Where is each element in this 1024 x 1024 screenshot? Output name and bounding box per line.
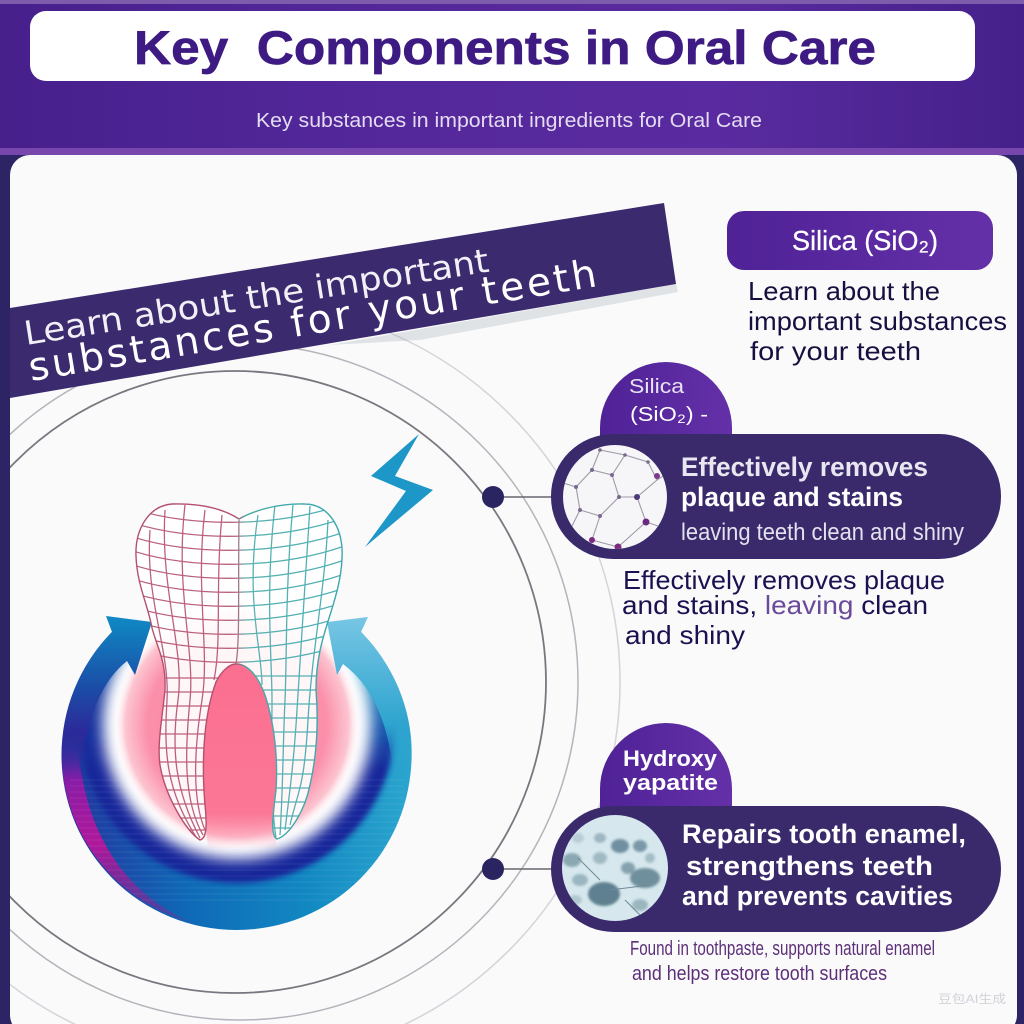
tab: silica: Silica [629, 376, 685, 398]
arrow: right [327, 617, 412, 770]
connector: silica node [482, 486, 554, 508]
watermark: 豆包AI生成 [938, 992, 1006, 1006]
label: silica pill [727, 211, 993, 270]
text: silica description: and shiny [625, 620, 745, 650]
tab: hydroxyapatite [600, 723, 732, 812]
text: hydroxyapatite benefit: and prevents cavities [682, 881, 953, 911]
text: intro paragraph: important substances [748, 306, 1007, 336]
panel: hydroxyapatite benefit [551, 806, 1001, 932]
inner shading [70, 686, 404, 900]
pink glow [113, 601, 361, 849]
text: silica benefit: Effectively removes [681, 452, 928, 482]
text: hydroxyapatite benefit: strengthens teeth [686, 851, 933, 881]
text: silica benefit: plaque and stains [681, 482, 903, 512]
text: silica description: Effectively removes plaque [623, 565, 945, 595]
text: silica benefit [681, 452, 964, 546]
text: hydroxyapatite benefit [682, 819, 966, 911]
text: silica benefit: leaving teeth clean and shiny [681, 519, 964, 546]
icon: tooth in gradient ring [61, 500, 412, 930]
banner: important substances: substances for your teeth [25, 252, 600, 391]
white glow [103, 591, 371, 859]
connector: hydroxyapatite node [482, 858, 554, 880]
concentric rings [0, 302, 620, 1024]
label: silica pill: Silica (SiO₂) [792, 225, 938, 256]
text: intro paragraph: Learn about the [748, 276, 940, 306]
title [30, 11, 975, 81]
banner: important substances: Learn about the important [21, 241, 492, 353]
text: intro paragraph [748, 276, 1007, 366]
text: intro paragraph: for your teeth [750, 336, 921, 366]
text: hydroxyapatite description: and helps restore tooth surfaces [632, 963, 887, 985]
tab: silica: (SiO₂) - [630, 404, 708, 426]
text: hydroxyapatite benefit: Repairs tooth enamel, [682, 819, 966, 849]
panel: silica benefit [551, 434, 1001, 559]
text: hydroxyapatite description [630, 938, 935, 985]
pink arch between roots [204, 664, 277, 848]
arrow: left [62, 616, 152, 770]
icon: lightning bolt [365, 434, 433, 547]
magenta rim [62, 745, 190, 922]
ring band [61, 632, 411, 930]
subtitle: Key substances in important ingredients for Oral Care [256, 110, 762, 132]
tab: hydroxyapatite: Hydroxy [623, 746, 718, 771]
header band [0, 0, 1024, 155]
text: silica description: and stains, leaving clean [622, 590, 928, 620]
tab: silica [600, 362, 732, 440]
title: Key Components in Oral Care [134, 21, 876, 74]
text: silica description [622, 565, 945, 650]
tab: hydroxyapatite: yapatite [623, 770, 718, 795]
tooth outline [136, 504, 342, 840]
banner: important substances [10, 203, 678, 398]
tooth mesh [130, 500, 350, 845]
icon: hydroxyapatite crystals [562, 815, 668, 921]
icon: silica hexagon lattice [560, 445, 672, 550]
text: hydroxyapatite description: Found in toothpaste, supports natural enamel [630, 938, 935, 960]
